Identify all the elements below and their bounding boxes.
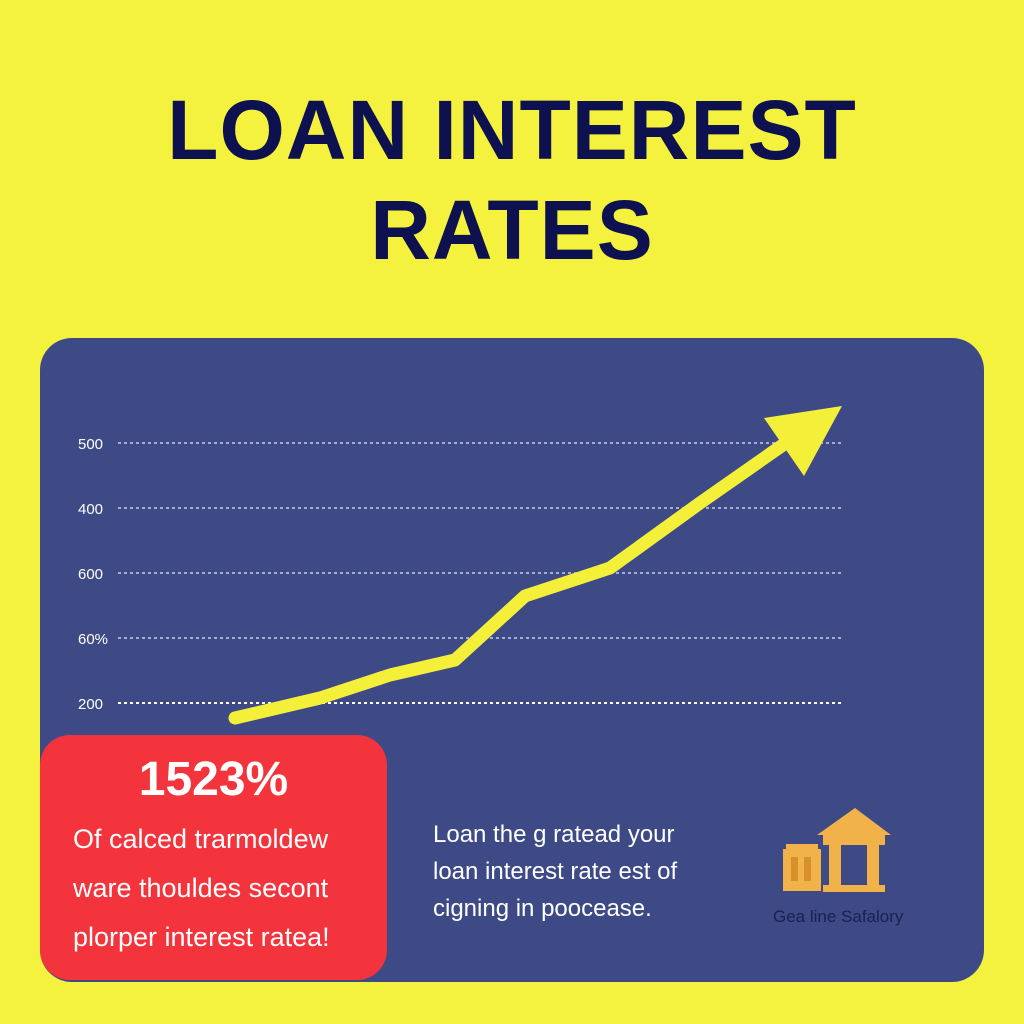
arrow: trend <box>235 406 842 718</box>
text block <box>433 821 678 922</box>
line chart: 500 <box>78 436 103 453</box>
stat text <box>73 824 330 952</box>
title: RATES <box>370 183 654 277</box>
icon: buildings <box>783 808 891 892</box>
line chart: 200 <box>78 696 103 713</box>
line chart: 60% <box>78 631 108 648</box>
line chart: 400 <box>78 501 103 518</box>
line chart: 600 <box>78 566 103 583</box>
text block: cigning in poocease. <box>433 895 652 922</box>
title <box>167 83 857 277</box>
text block: loan interest rate est of <box>433 858 677 885</box>
stat text: Of calced trarmoldew <box>73 824 328 854</box>
stat text: plorper interest ratea! <box>73 922 330 952</box>
text block: Loan the g ratead your <box>433 821 675 848</box>
title: LOAN INTEREST <box>167 83 857 177</box>
panel: chart <box>40 338 984 982</box>
icon caption: Gea line Safalory <box>773 907 903 926</box>
stat text: ware thouldes secont <box>73 873 328 903</box>
stat number: 1523% <box>139 753 288 806</box>
callout: red stat <box>40 735 387 980</box>
